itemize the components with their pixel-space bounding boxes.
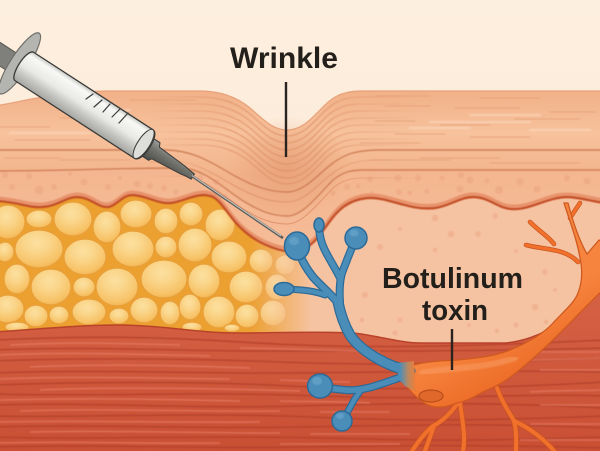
pocket beneath the dermis (285, 197, 600, 350)
cell body and axon (407, 203, 600, 407)
red membrane line (0, 192, 600, 251)
synaptic bulbs (274, 218, 367, 431)
blue to orange transition (398, 361, 416, 392)
icon: syringe (0, 1, 283, 238)
plunger (0, 25, 24, 75)
panel: fat layer (0, 190, 600, 340)
muscle fibres (0, 337, 600, 448)
needle hub (139, 137, 199, 185)
fat cells (0, 200, 295, 332)
wrinkle shading and striations (0, 96, 600, 224)
label: Botulinum toxin: toxin (422, 295, 488, 327)
label: Botulinum toxin (382, 263, 523, 370)
leader line: Botulinum toxin (451, 329, 453, 370)
flange (0, 28, 47, 98)
label: Botulinum toxin: Botulinum (382, 263, 523, 295)
neuron: blue part (274, 218, 416, 431)
skin boundary lines (0, 150, 600, 216)
panel: skin layers (0, 91, 600, 350)
graduation marks (86, 94, 128, 123)
label: Wrinkle: Wrinkle (230, 42, 338, 75)
short fibres in flat skin (0, 96, 595, 163)
epidermis layer (0, 91, 600, 260)
outline (287, 225, 410, 422)
dermis layer with dots (0, 168, 600, 345)
upper dendrites (412, 203, 580, 451)
barrel (10, 49, 159, 162)
neuron: orange part (407, 203, 600, 451)
body highlight (422, 358, 515, 373)
nucleus (419, 390, 443, 402)
needle (192, 176, 283, 238)
lower dendrites (412, 388, 554, 451)
leader line: Wrinkle (285, 82, 287, 157)
panel: muscle layer (0, 285, 600, 451)
fill (287, 225, 410, 422)
label: Wrinkle (230, 42, 338, 157)
